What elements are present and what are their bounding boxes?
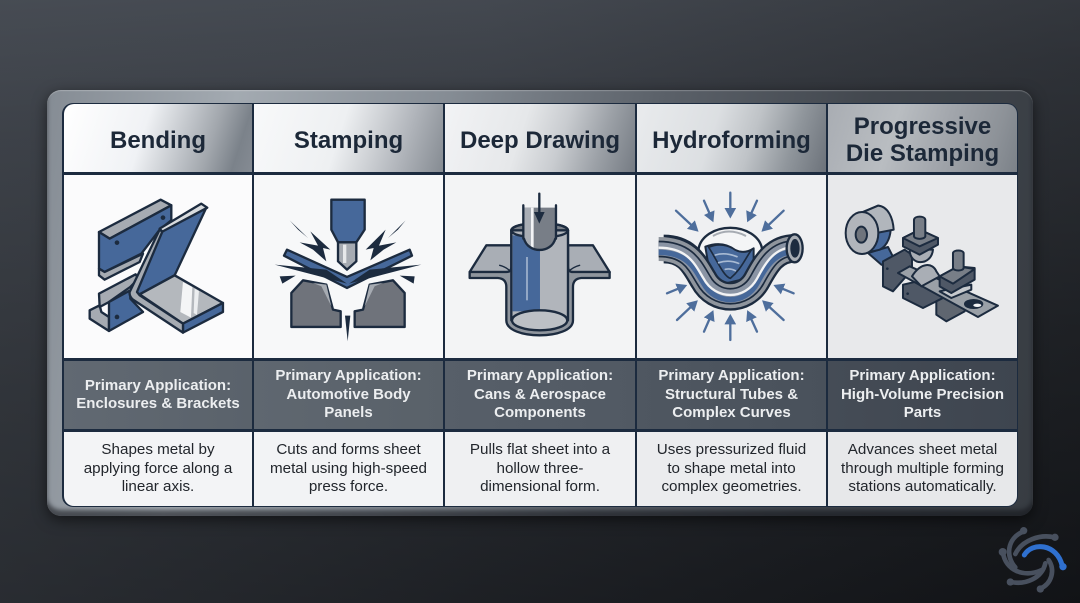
description: Progressive Die Stamping: Advances sheet metal — [848, 441, 997, 458]
description: Hydroforming: to shape metal into — [667, 460, 796, 477]
description: Bending: applying force along a — [84, 460, 232, 477]
heading: Deep Drawing: Deep Drawing — [460, 126, 620, 154]
illustration cell: Bending — [64, 175, 252, 358]
heading: Hydroforming: Hydroforming — [652, 126, 811, 154]
panel: Deep Drawing — [445, 104, 635, 506]
description: Bending: Shapes metal by — [101, 441, 215, 458]
icon: coil feeding progressive die stations — [844, 204, 999, 322]
panel: Stamping — [254, 104, 443, 506]
application: Progressive Die Stamping: Primary Application: — [849, 367, 996, 384]
description: Stamping: press force. — [309, 478, 388, 495]
application: Progressive Die Stamping: High-Volume Precision — [841, 386, 1004, 403]
application: Bending: Primary Application: — [85, 376, 231, 394]
description: Progressive Die Stamping — [828, 432, 1017, 506]
description: Deep Drawing: hollow three- — [497, 460, 583, 477]
panel: Hydroforming — [637, 104, 826, 506]
heading: Stamping: Stamping — [294, 126, 403, 154]
application: Hydroforming: Complex Curves — [672, 404, 791, 421]
icon: press brake bending a sheet — [88, 198, 224, 334]
application: Stamping: Automotive Body — [286, 386, 411, 403]
heading: Progressive Die Stamping: Progressive — [854, 113, 991, 140]
description: Hydroforming — [637, 432, 826, 506]
heading: Bending: Bending — [110, 126, 206, 154]
application: Bending — [64, 361, 252, 429]
application: Stamping — [254, 361, 443, 429]
application: Deep Drawing: Cans & Aerospace — [474, 386, 606, 403]
heading: Progressive Die Stamping — [828, 104, 1017, 172]
application: Progressive Die Stamping: Parts — [904, 404, 941, 421]
heading: Deep Drawing — [445, 104, 635, 172]
description: Deep Drawing: Pulls flat sheet into a — [470, 441, 610, 458]
illustration cell: Hydroforming — [637, 175, 826, 358]
description: Stamping: Cuts and forms sheet — [276, 441, 421, 458]
panel: Bending — [64, 104, 252, 506]
application: Hydroforming: Structural Tubes & — [665, 386, 798, 403]
application: Deep Drawing: Components — [494, 404, 586, 421]
application: Progressive Die Stamping — [828, 361, 1017, 429]
application: Hydroforming: Primary Application: — [658, 367, 805, 384]
heading: Progressive Die Stamping: Die Stamping — [846, 140, 999, 167]
icon: punch stamping sheet into die — [275, 198, 421, 341]
description: Hydroforming: complex geometries. — [661, 478, 802, 495]
application: Bending: Enclosures & Brackets — [76, 395, 240, 412]
table backing — [62, 103, 1018, 507]
description: Bending: linear axis. — [122, 478, 194, 495]
application: Deep Drawing — [445, 361, 635, 429]
description: Bending — [64, 432, 252, 506]
application: Hydroforming — [637, 361, 826, 429]
icon: pressurized fluid forming tube — [658, 192, 804, 342]
illustration cell: Deep Drawing — [445, 175, 635, 358]
heading: Bending — [64, 104, 252, 172]
illustration cell: Stamping — [254, 175, 443, 358]
description: Hydroforming: Uses pressurized fluid — [657, 441, 806, 458]
metal frame panel — [47, 90, 1033, 516]
panel: Progressive Die Stamping — [828, 104, 1017, 506]
description: Deep Drawing: dimensional form. — [480, 478, 600, 495]
application: Deep Drawing: Primary Application: — [467, 367, 613, 384]
icon: swirl wrench logo — [998, 527, 1067, 593]
application: Stamping: Primary Application: — [275, 367, 422, 384]
description: Deep Drawing — [445, 432, 635, 506]
heading: Stamping — [254, 104, 443, 172]
description: Stamping: metal using high-speed — [270, 460, 427, 477]
illustration cell: Progressive Die Stamping — [828, 175, 1017, 358]
description: Progressive Die Stamping: through multiple forming — [841, 460, 1004, 477]
application: Stamping: Panels — [324, 404, 373, 421]
heading: Hydroforming — [637, 104, 826, 172]
blue wrench arm — [1024, 547, 1066, 570]
icon: punch drawing sheet into cup — [468, 192, 611, 336]
description: Progressive Die Stamping: stations automatically. — [848, 478, 997, 495]
description: Stamping — [254, 432, 443, 506]
